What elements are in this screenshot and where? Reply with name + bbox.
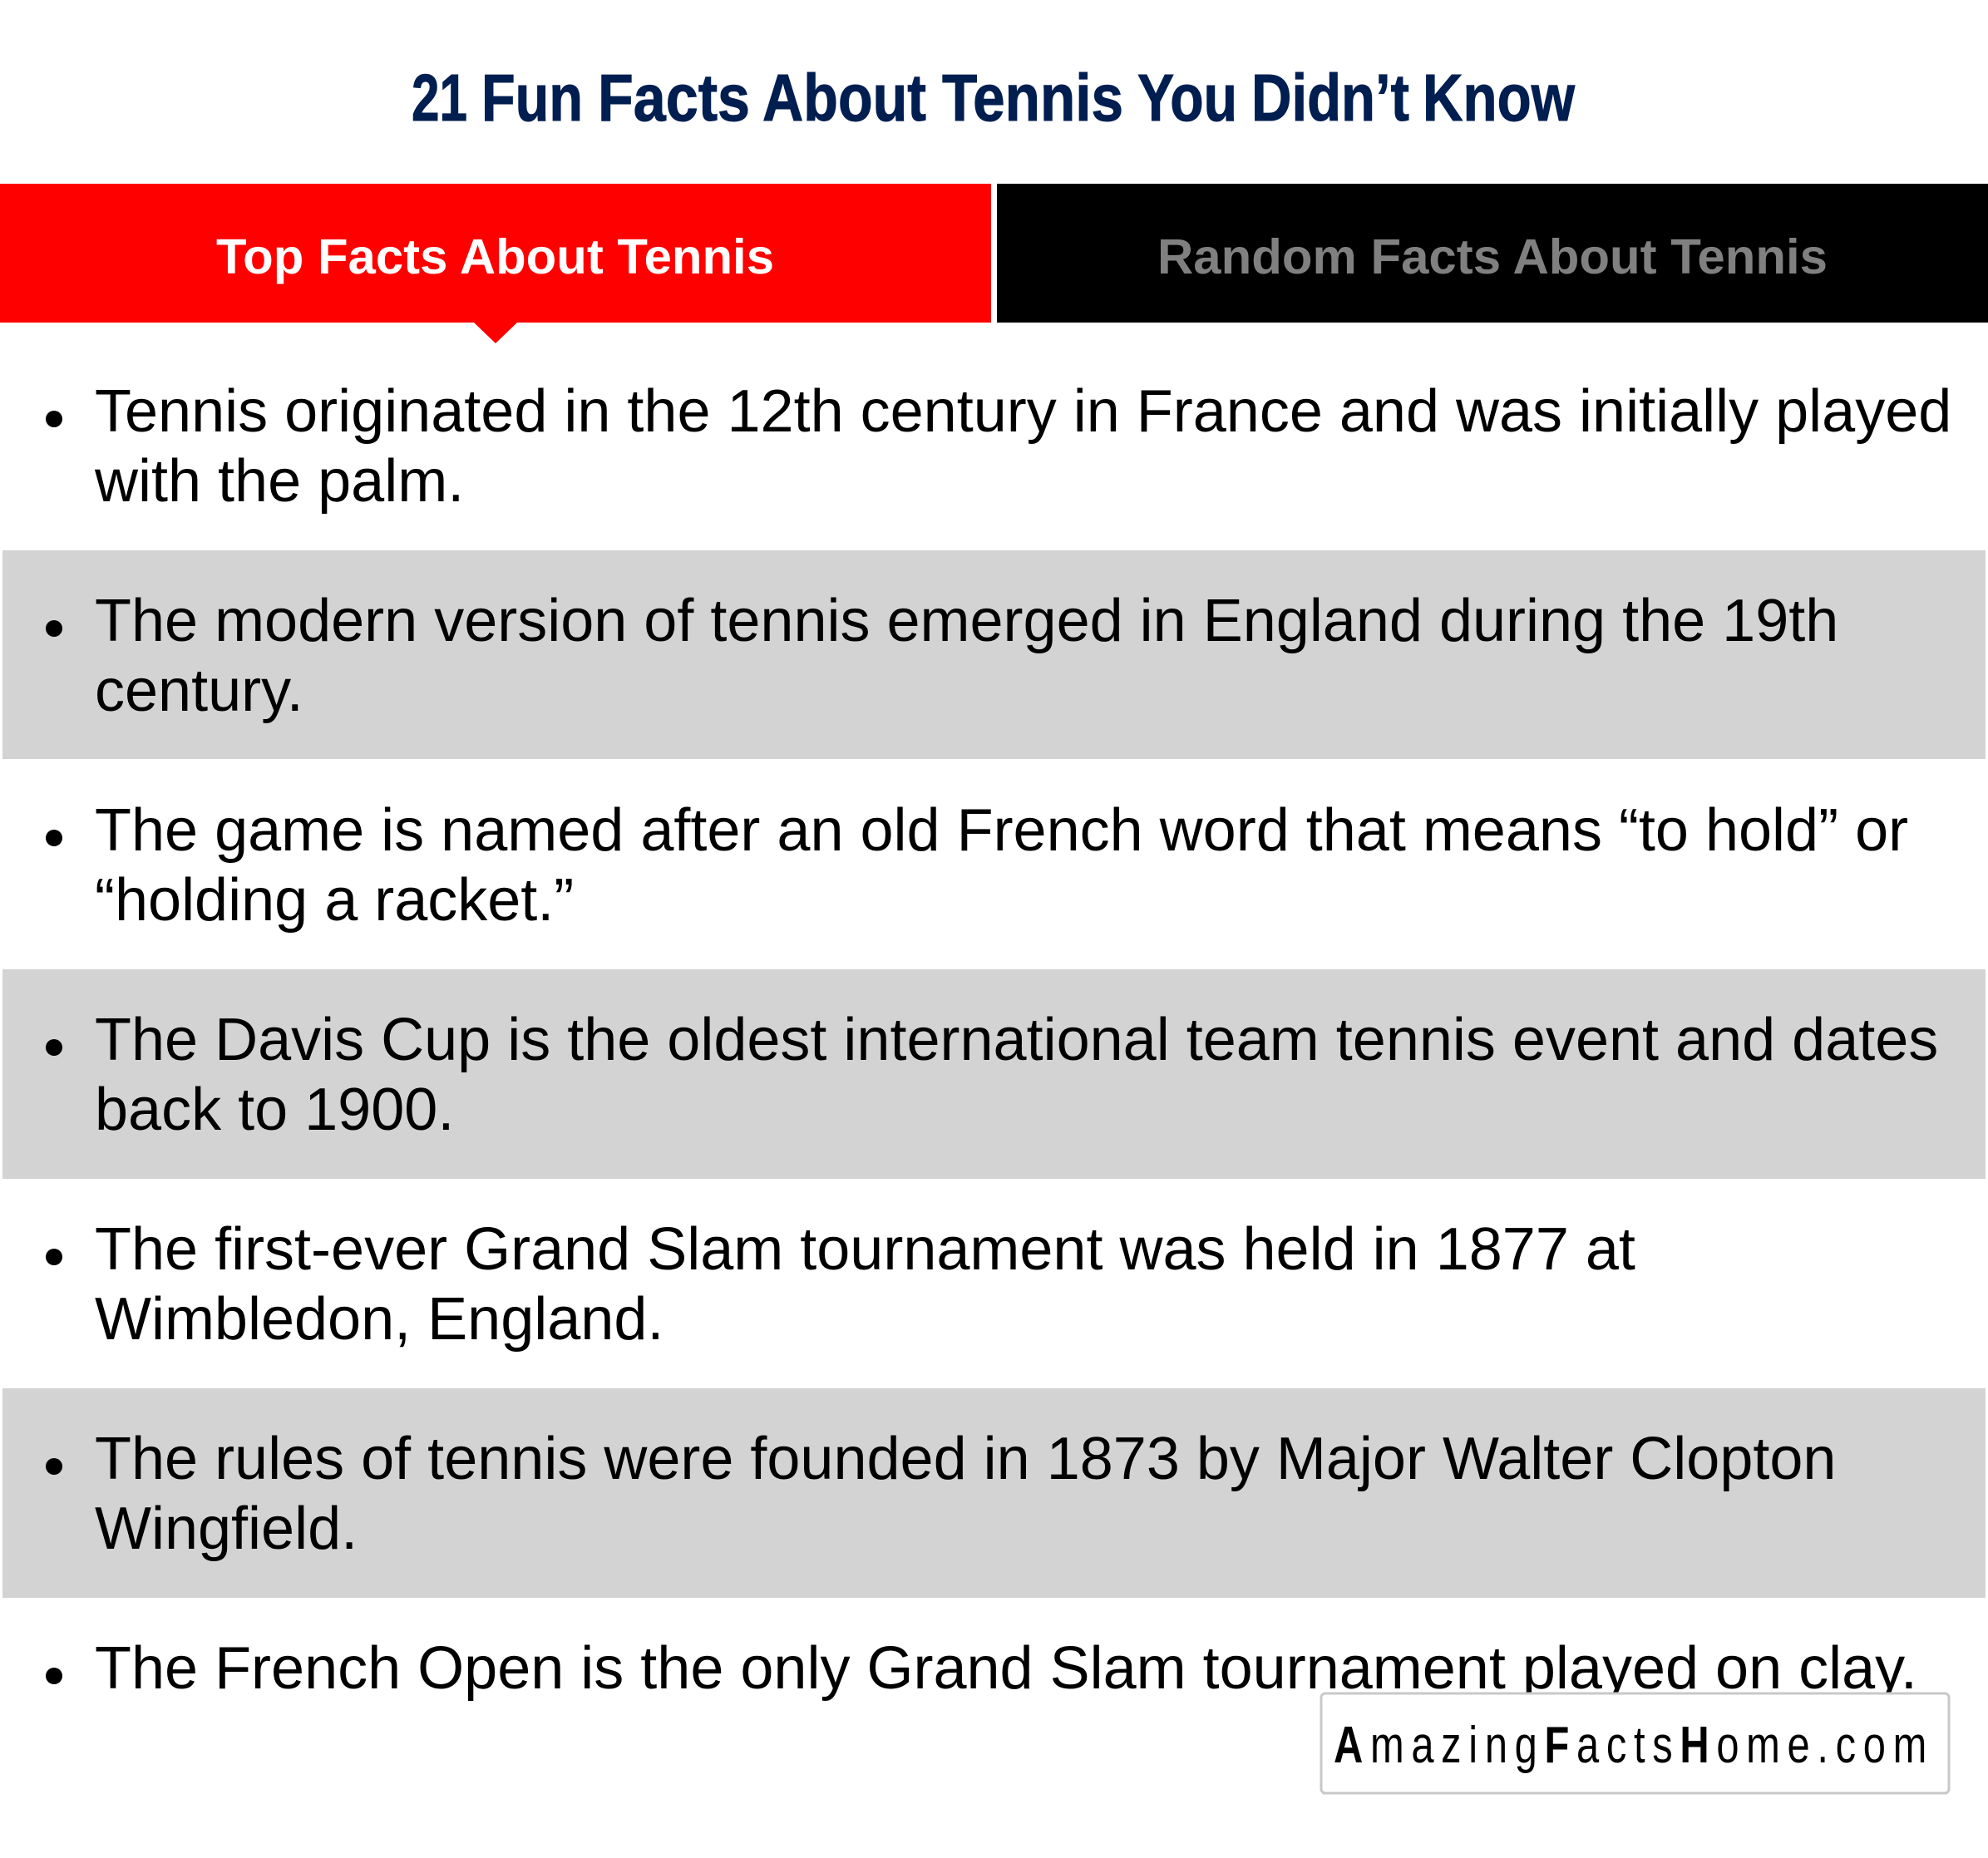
fact 2: century.	[95, 658, 303, 724]
fact 5	[46, 1216, 1635, 1353]
fact 3: “holding a racket.”	[95, 867, 574, 934]
title: Know	[1423, 61, 1576, 135]
tab: random facts (inactive): Random Facts About Tennis	[1157, 229, 1828, 284]
title: Didn’t	[1251, 61, 1409, 135]
fact 6	[2, 1388, 1986, 1598]
fact 5: The first-ever Grand Slam tournament was held in 1877 at	[95, 1216, 1635, 1283]
fact 6: Wingfield.	[95, 1496, 358, 1562]
fact 7: The French Open is the only Grand Slam tournament played on clay.	[95, 1635, 1917, 1702]
title: Fun	[481, 61, 583, 135]
fact 1: Tennis originated in the 12th century in France and was initially played	[95, 378, 1951, 445]
fact 2: The modern version of tennis emerged in England during the 19th	[95, 588, 1838, 654]
watermark badge: AmazingFactsHome.com	[1334, 1717, 1934, 1774]
title: 21	[412, 61, 467, 135]
title: You	[1137, 61, 1237, 135]
tab: random facts (inactive)	[997, 184, 1988, 323]
fact 3: The game is named after an old French word that means “to hold” or	[95, 797, 1908, 864]
fact 3	[46, 797, 1908, 934]
title: Tennis	[942, 61, 1123, 135]
watermark badge	[1321, 1693, 1949, 1794]
title: About	[762, 61, 926, 135]
title: Facts	[598, 61, 750, 135]
fact 1	[46, 378, 1951, 515]
fact 5: Wimbledon, England.	[95, 1286, 663, 1353]
fact 1: with the palm.	[94, 448, 464, 515]
title	[412, 61, 1576, 135]
fact 4: back to 1900.	[95, 1077, 454, 1143]
tab: top facts (active)	[0, 184, 991, 343]
fact 2	[2, 550, 1986, 759]
fact 6: The rules of tennis were founded in 1873 by Major Walter Clopton	[95, 1426, 1836, 1492]
tab: top facts (active): Top Facts About Tennis	[216, 229, 774, 284]
fact 4: The Davis Cup is the oldest international team tennis event and dates	[95, 1007, 1938, 1073]
fact 4	[2, 969, 1986, 1179]
